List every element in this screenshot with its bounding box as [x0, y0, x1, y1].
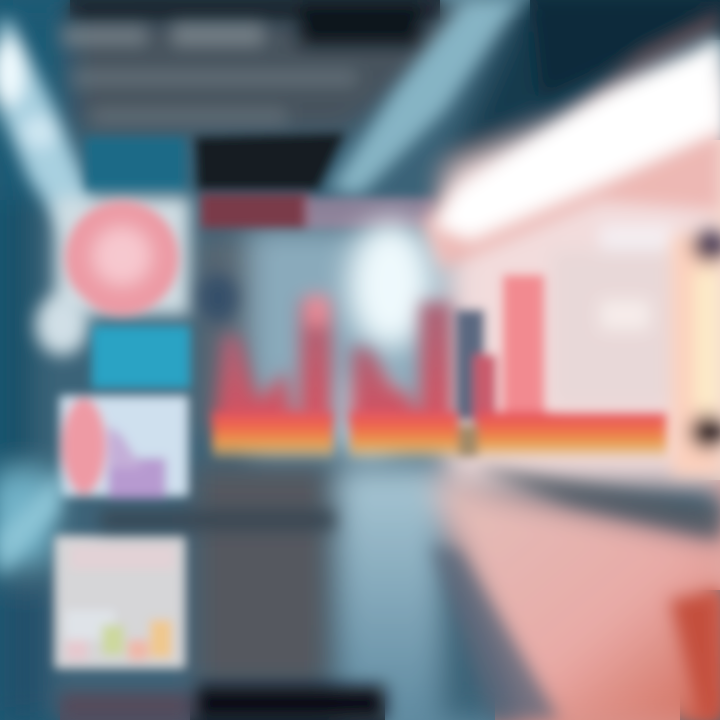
- panel: middle bar chart: [348, 221, 432, 450]
- header text lines: [62, 24, 357, 124]
- panel: teal block: [92, 326, 190, 388]
- panel: left bar chart: [215, 295, 332, 425]
- panel: far right card: [672, 230, 720, 475]
- floor streaks: [430, 465, 720, 720]
- teal and black header blocks: [85, 133, 345, 193]
- floor shadow under left cards: [100, 510, 335, 530]
- dark red banner: [200, 194, 435, 228]
- dark ceiling band: [70, 0, 720, 100]
- dark divider blob: [198, 274, 238, 322]
- panel: circle gauge card: [55, 197, 190, 315]
- panel: right bar chart: [456, 275, 545, 430]
- orange and yellow baseline band: [213, 412, 668, 458]
- bright pink ceiling beam: [420, 10, 720, 270]
- left lower reflection: [0, 470, 60, 575]
- central light beam: [330, 0, 520, 195]
- panel: right report card: [552, 225, 677, 406]
- dark bottom edge: [60, 686, 385, 720]
- panel: pink and purple chart card: [60, 396, 188, 498]
- panel: bottom left pastel table: [55, 536, 185, 668]
- icon: pink circle: [65, 201, 179, 315]
- left light beam: [0, 20, 92, 240]
- left white glow: [36, 295, 88, 355]
